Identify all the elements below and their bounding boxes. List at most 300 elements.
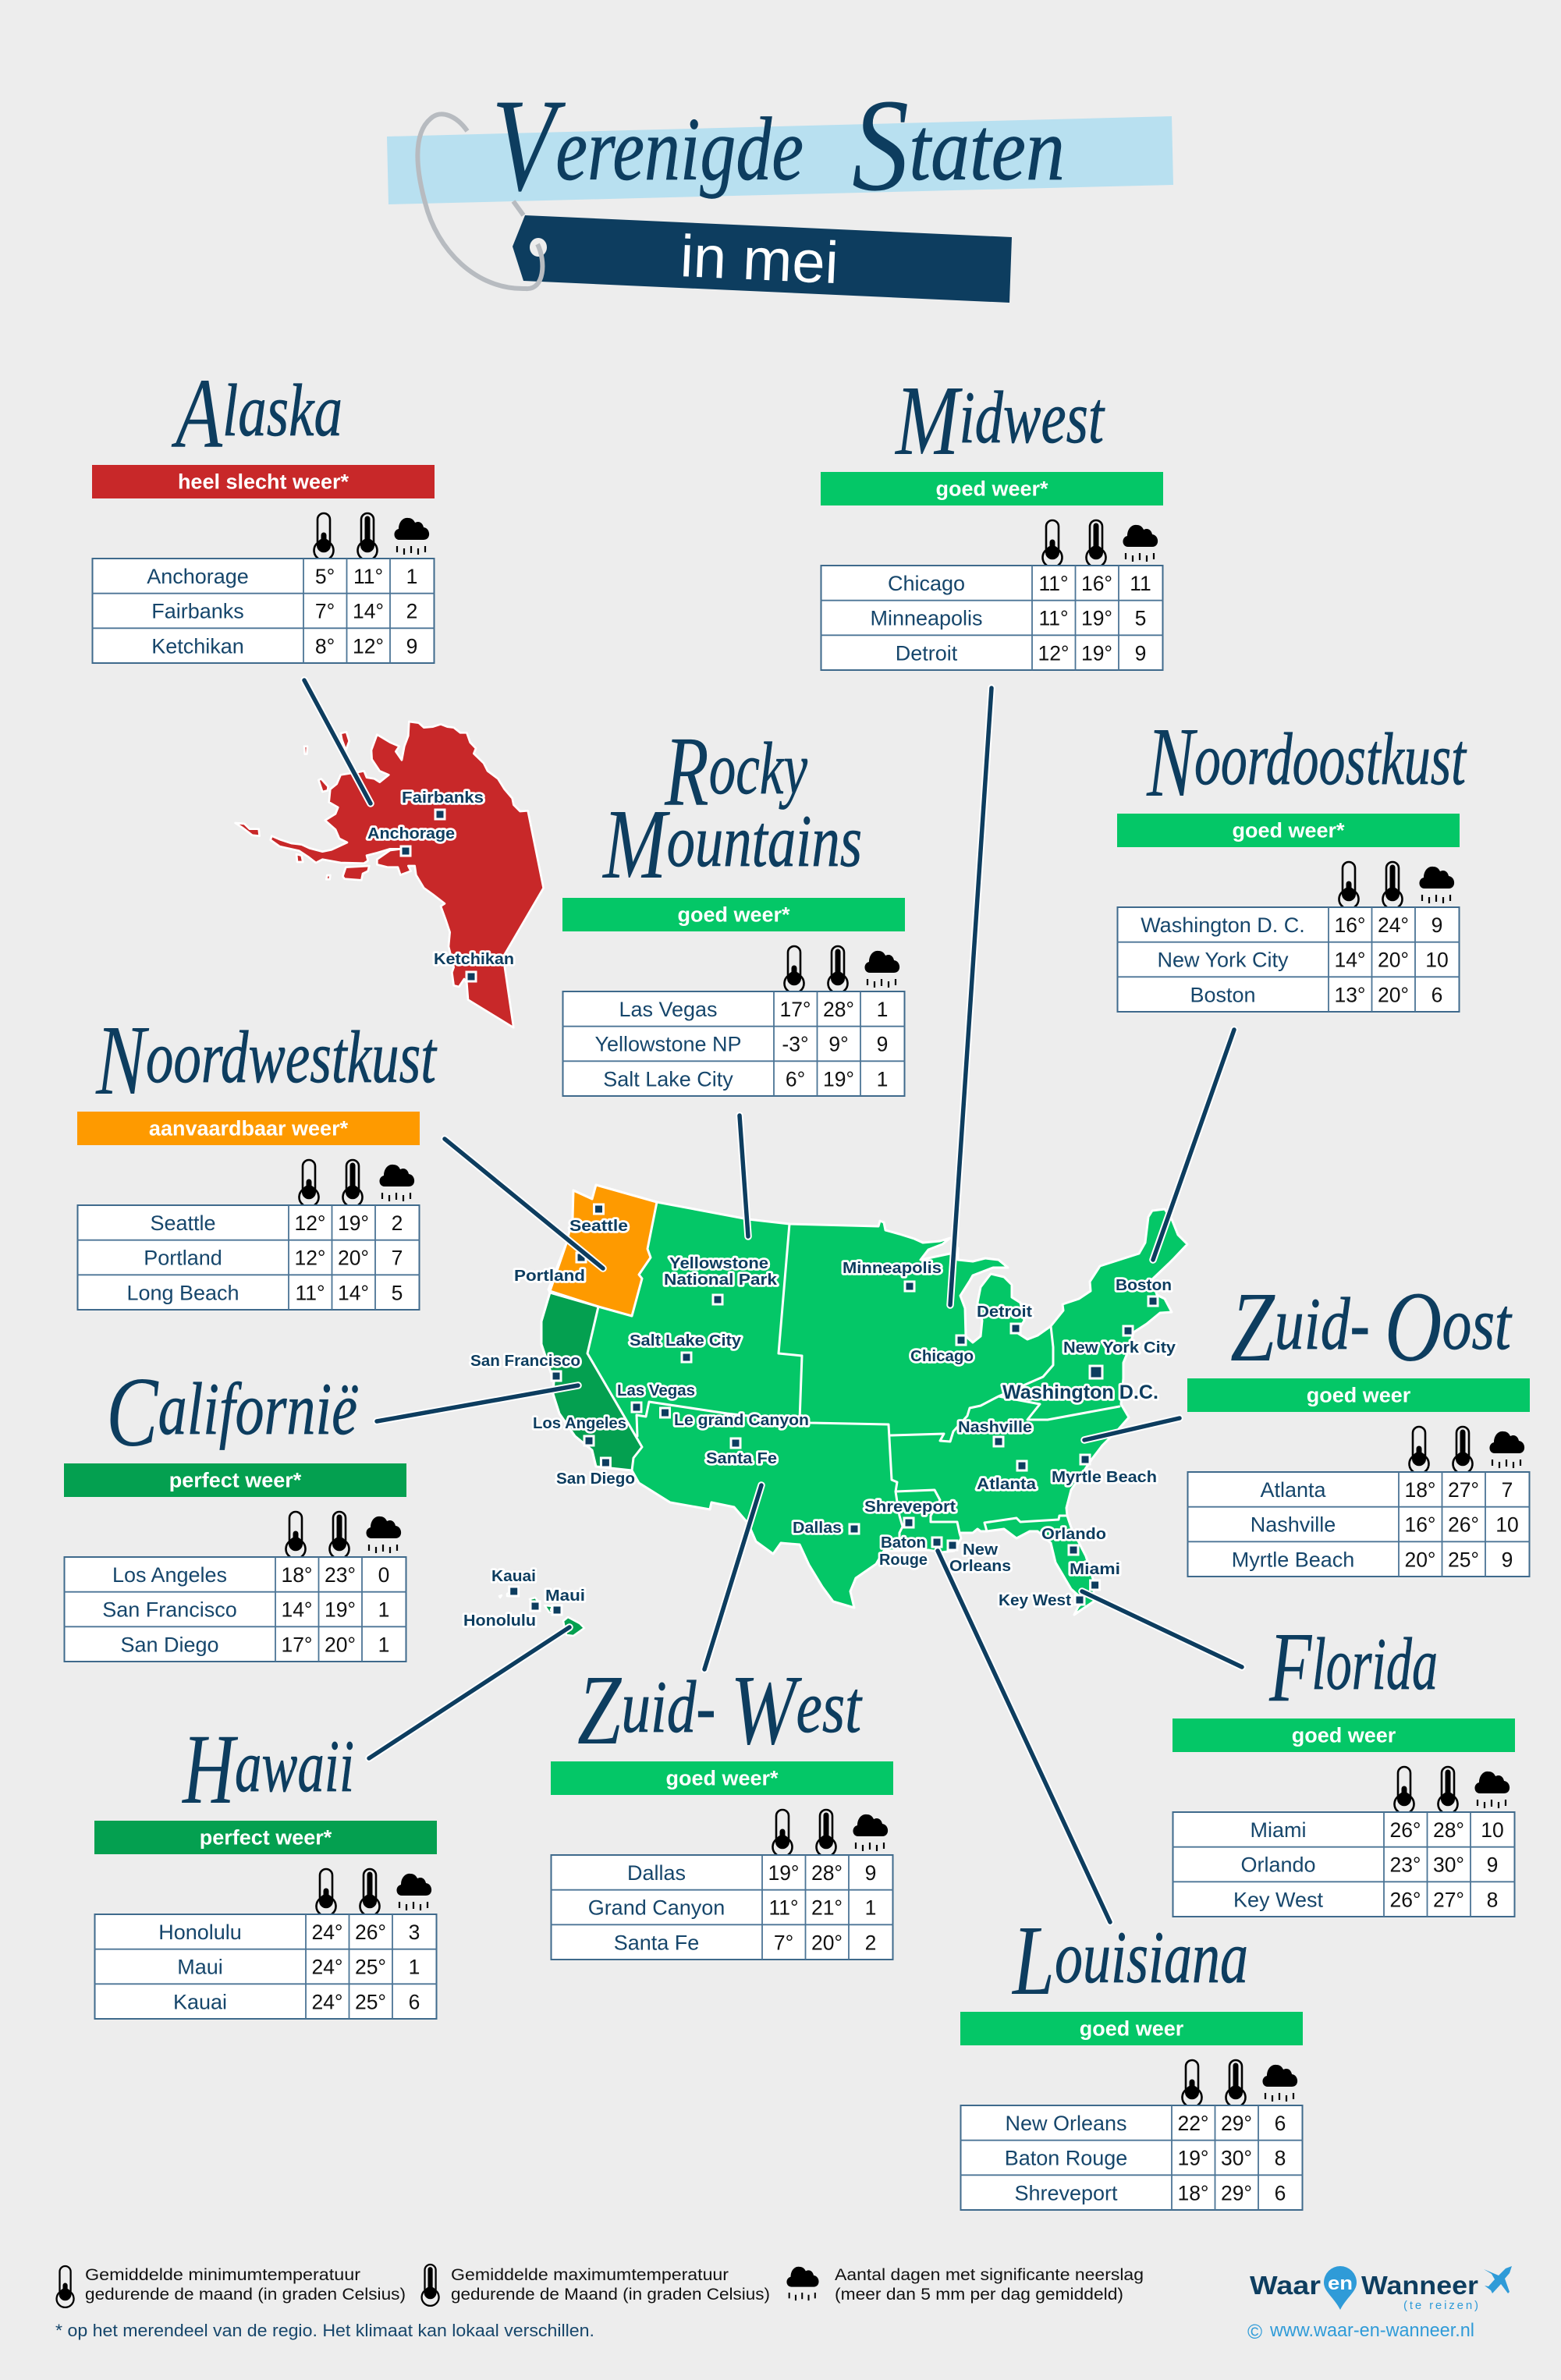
- weather table: 16°: [1081, 572, 1112, 595]
- weather table: 1: [406, 565, 417, 588]
- weather table: 28°: [823, 998, 854, 1021]
- city: Minneapolis: [843, 1259, 942, 1291]
- city: Shreveport: [864, 1498, 956, 1527]
- city: Santa Fe: Santa Fe: [706, 1449, 777, 1467]
- weather table: 11°: [353, 565, 383, 588]
- legend: precipitation: Aantal dagen met significante neerslag: [835, 2266, 1144, 2284]
- weather table: 25°: [355, 1990, 386, 2013]
- weather table: 9: [406, 634, 417, 658]
- weather table: Seattle: [150, 1211, 216, 1235]
- heading: A: [172, 358, 223, 469]
- city: Dallas: Dallas: [793, 1519, 842, 1537]
- weather table: 17°: [281, 1633, 313, 1656]
- city: Atlanta: [977, 1461, 1037, 1493]
- weather table: goed weer*: [665, 1767, 779, 1790]
- city: New Orleans: [948, 1541, 1011, 1575]
- weather table: 12°: [294, 1247, 326, 1270]
- weather table: Maui: [177, 1956, 223, 1979]
- callout line: Noordwestkust: [445, 1139, 603, 1268]
- weather table: 24°: [311, 1990, 343, 2013]
- heading: W: [730, 1655, 803, 1765]
- weather table: Miami: [1250, 1818, 1306, 1842]
- panel: Californië: [64, 1357, 406, 1662]
- weather table: 19°: [768, 1861, 800, 1885]
- city: Nashville: [958, 1418, 1032, 1446]
- weather table: 5°: [315, 565, 335, 588]
- weather table: 6°: [786, 1067, 805, 1091]
- callout line: Hawaii: [369, 1627, 569, 1758]
- weather table: 9°: [828, 1033, 849, 1056]
- weather table: Los Angeles: [112, 1563, 227, 1587]
- callout line: Florida: [1082, 1591, 1242, 1667]
- city: Portland: Portland: [514, 1267, 585, 1285]
- weather table: Kauai: [173, 1990, 227, 2013]
- heading: laska: [222, 369, 342, 452]
- city: Los Angeles: [533, 1414, 626, 1445]
- city: Kauai: Kauai: [491, 1567, 536, 1585]
- main title second word: S: [852, 72, 909, 218]
- weather table: -3°: [782, 1033, 809, 1056]
- weather table: goed weer: [1292, 1724, 1396, 1747]
- weather table: 26°: [1389, 1888, 1421, 1911]
- callout line: Alaska: [304, 680, 371, 803]
- weather table: 2: [865, 1931, 876, 1954]
- city: Shreveport: Shreveport: [864, 1498, 956, 1516]
- weather table: 2: [392, 1211, 403, 1235]
- weather table: [562, 898, 905, 1096]
- city: Orlando: Orlando: [1041, 1525, 1106, 1543]
- region borders: [637, 1224, 1119, 1537]
- weather table: 7: [1502, 1478, 1513, 1502]
- weather table: 19°: [1081, 607, 1112, 630]
- city labels: west: [463, 1204, 859, 1630]
- weather table: 20°: [1378, 949, 1409, 972]
- weather table: 6: [409, 1990, 420, 2013]
- heading: R: [664, 716, 709, 827]
- heading: C: [106, 1357, 159, 1467]
- weather table: 5: [1135, 607, 1146, 630]
- city: Portland: [514, 1253, 586, 1285]
- weather table: 7°: [774, 1931, 793, 1954]
- map: Hawaii islands: [499, 1592, 584, 1636]
- weather table: 19°: [1177, 2147, 1209, 2170]
- city labels: east: [843, 1259, 1176, 1609]
- legend: minimum temperature: [57, 2266, 406, 2307]
- weather table: 23°: [325, 1563, 356, 1587]
- heading: uid-: [1275, 1282, 1385, 1365]
- weather table: [1117, 814, 1460, 1012]
- weather table: 1: [409, 1956, 420, 1979]
- weather table: 10: [1425, 949, 1449, 972]
- weather table: 9: [865, 1861, 876, 1885]
- legend: minimum temperature: gedurende de maand (in graden Celsius): [85, 2286, 406, 2304]
- tag string: [417, 114, 542, 289]
- weather table: [1173, 1718, 1515, 1917]
- weather table: 1: [865, 1896, 876, 1920]
- weather table: 26°: [1389, 1818, 1421, 1842]
- weather table: San Diego: [120, 1633, 219, 1656]
- heading: lorida: [1311, 1623, 1438, 1705]
- title ribbon: [387, 116, 1173, 204]
- weather table: 18°: [1404, 1478, 1436, 1502]
- panel: Florida: [1173, 1612, 1515, 1917]
- weather table: goed weer*: [677, 903, 790, 927]
- weather table: [551, 1761, 893, 1960]
- city: Miami: [1070, 1560, 1120, 1590]
- city: Washington D.C.: [1002, 1366, 1158, 1403]
- weather table: 12°: [294, 1211, 326, 1235]
- weather table: Shreveport: [1014, 2181, 1118, 2204]
- city: San Francisco: [470, 1352, 580, 1381]
- weather table: 25°: [1448, 1548, 1479, 1571]
- weather table: Salt Lake City: [603, 1067, 733, 1091]
- legend: maximum temperature: gedurende de Maand (in graden Celsius): [451, 2286, 770, 2304]
- region: Noordwestkust: [550, 1185, 657, 1316]
- weather table: [821, 472, 1163, 670]
- city: Key West: Key West: [999, 1591, 1071, 1609]
- logo word: Waar: Waar: [1250, 2271, 1321, 2300]
- heading: F: [1268, 1612, 1313, 1722]
- weather table: 20°: [1404, 1548, 1436, 1571]
- weather table: Nashville: [1251, 1513, 1336, 1537]
- panel: Zuid-West: [551, 1655, 893, 1960]
- city: San Diego: San Diego: [556, 1470, 635, 1488]
- city: Fairbanks: [402, 789, 484, 819]
- city: Chicago: [910, 1335, 974, 1365]
- city: Seattle: [569, 1204, 628, 1235]
- weather table: Atlanta: [1260, 1478, 1327, 1502]
- weather table: San Francisco: [102, 1598, 237, 1622]
- luggage tag: [513, 215, 1012, 303]
- callout line: Zuid-Oost: [1084, 1418, 1180, 1440]
- heading: uid-: [621, 1665, 730, 1748]
- weather table: Baton Rouge: [1005, 2147, 1127, 2170]
- heading: idwest: [959, 376, 1105, 459]
- weather table: 14°: [353, 600, 384, 623]
- city: Boston: [1116, 1276, 1172, 1306]
- city: Detroit: Detroit: [977, 1303, 1032, 1321]
- logo pin text: en: [1328, 2273, 1353, 2294]
- weather table: 19°: [823, 1067, 854, 1091]
- city: Boston: Boston: [1116, 1276, 1172, 1294]
- callout line: Rocky Mountains: [740, 1116, 748, 1236]
- weather table: 1: [877, 1067, 888, 1091]
- weather table: 1: [877, 998, 888, 1021]
- weather table: Boston: [1190, 983, 1256, 1006]
- weather table: 14°: [338, 1281, 369, 1304]
- city: Myrtle Beach: Myrtle Beach: [1052, 1468, 1157, 1486]
- map: contiguous United States: [541, 1185, 1187, 1615]
- weather table: perfect weer*: [200, 1826, 332, 1850]
- city: New York City: New York City: [1063, 1339, 1176, 1357]
- city: Myrtle Beach: [1052, 1455, 1157, 1486]
- weather table: 18°: [1177, 2181, 1209, 2204]
- callout line: Noordoostkust: [1153, 1030, 1234, 1260]
- title block: [387, 72, 1173, 303]
- weather table: 11: [1130, 572, 1151, 595]
- website: www.waar-en-wanneer.nl: [1269, 2320, 1474, 2341]
- heading: M: [894, 365, 963, 476]
- weather table: Long Beach: [126, 1281, 239, 1304]
- city: Yellowstone National Park: [664, 1254, 778, 1304]
- subtitle: in mei: [679, 223, 840, 296]
- city: Baton Rouge: Baton: [881, 1534, 926, 1552]
- weather table: Santa Fe: [614, 1931, 699, 1954]
- city: Le grand Canyon: Le grand Canyon: [674, 1411, 809, 1429]
- weather table: goed weer*: [935, 477, 1048, 501]
- icon: copyright: ©: [1247, 2320, 1262, 2343]
- heading: H: [182, 1714, 239, 1825]
- city: New York City: [1063, 1326, 1176, 1357]
- city: Seattle: Seattle: [569, 1217, 628, 1235]
- weather table: 0: [378, 1563, 389, 1587]
- legend: precipitation: (meer dan 5 mm per dag gemiddeld): [835, 2286, 1123, 2304]
- city: Ketchikan: Ketchikan: [434, 950, 514, 968]
- heading: Z: [1230, 1272, 1275, 1382]
- weather table: [64, 1463, 406, 1662]
- weather table: 16°: [1334, 913, 1366, 937]
- heading: ocky: [709, 727, 808, 810]
- weather table: 24°: [1378, 913, 1409, 937]
- weather table: goed weer: [1080, 2017, 1184, 2041]
- weather table: [94, 1821, 437, 2019]
- region: Californië: [541, 1293, 642, 1470]
- city: Miami: Miami: [1070, 1560, 1120, 1578]
- weather table: Portland: [144, 1247, 222, 1270]
- weather table: 19°: [338, 1211, 369, 1235]
- heading: ost: [1442, 1282, 1513, 1365]
- weather table: heel slecht weer*: [178, 470, 349, 494]
- weather table: 7°: [315, 600, 335, 623]
- weather table: 13°: [1334, 983, 1366, 1006]
- weather table: 28°: [811, 1861, 843, 1885]
- heading: ouisiana: [1055, 1916, 1248, 1999]
- heading: alifornië: [158, 1367, 358, 1450]
- weather table: 14°: [281, 1598, 313, 1622]
- main title: erenigde: [555, 100, 804, 200]
- city: Baton Rouge: Rouge: [879, 1551, 928, 1569]
- panel: Noordwestkust: [77, 1005, 438, 1310]
- legend: [57, 2265, 1144, 2307]
- panel: Noordoostkust: [1117, 707, 1467, 1012]
- weather table: 20°: [811, 1931, 843, 1954]
- weather table: 5: [392, 1281, 403, 1304]
- city: Honolulu: [463, 1601, 540, 1630]
- weather table: Detroit: [896, 641, 958, 665]
- city: Yellowstone National Park: Yellowstone: [669, 1254, 768, 1272]
- weather table: New Orleans: [1005, 2112, 1127, 2135]
- weather table: 2: [406, 600, 417, 623]
- weather table: Orlando: [1240, 1853, 1316, 1877]
- heading: M: [601, 789, 670, 899]
- weather table: 30°: [1433, 1853, 1464, 1877]
- weather table: 11°: [1038, 607, 1069, 630]
- legend: maximum temperature: [422, 2265, 770, 2306]
- panel: Zuid-Oost: [1187, 1272, 1530, 1577]
- city: Salt Lake City: Salt Lake City: [630, 1332, 742, 1350]
- panel: Hawaii: [94, 1714, 437, 2019]
- city: Fairbanks: Fairbanks: [402, 789, 484, 807]
- city: Washington D.C.: Washington D.C.: [1002, 1382, 1158, 1403]
- weather table: Yellowstone NP: [594, 1033, 742, 1056]
- weather table: aanvaardbaar weer*: [149, 1117, 349, 1140]
- city: Las Vegas: [617, 1382, 695, 1412]
- heading: N: [95, 1005, 150, 1116]
- weather table: 11°: [295, 1281, 325, 1304]
- city: Detroit: [977, 1303, 1032, 1333]
- panel: Louisiana: [960, 1905, 1303, 2210]
- weather table: 20°: [1378, 983, 1409, 1006]
- weather table: 30°: [1221, 2147, 1252, 2170]
- weather table: 24°: [311, 1921, 343, 1944]
- weather table: 19°: [1081, 641, 1112, 665]
- weather table: 6: [1275, 2181, 1286, 2204]
- legend: minimum temperature: Gemiddelde minimumtemperatuur: [85, 2266, 360, 2284]
- city: New Orleans: New: [963, 1541, 998, 1559]
- city: Salt Lake City: [630, 1332, 742, 1362]
- city: Maui: [545, 1587, 585, 1615]
- city: Chicago: Chicago: [910, 1347, 974, 1365]
- weather table: 6: [1275, 2112, 1286, 2135]
- logo: [1247, 2266, 1512, 2343]
- city: Las Vegas: Las Vegas: [617, 1382, 695, 1399]
- city: Maui: Maui: [545, 1587, 585, 1605]
- heading: O: [1385, 1272, 1442, 1382]
- weather table: 12°: [1038, 641, 1070, 665]
- weather table: 27°: [1448, 1478, 1479, 1502]
- map: Alaska: [236, 722, 544, 1027]
- city: Minneapolis: Minneapolis: [843, 1259, 942, 1277]
- panel: Rocky Mountains: [562, 716, 905, 1096]
- weather table: Grand Canyon: [588, 1896, 725, 1920]
- city: Santa Fe: [706, 1438, 777, 1467]
- heading: ountains: [667, 800, 862, 882]
- weather table: Anchorage: [147, 565, 249, 588]
- logo word: Wanneer: Wanneer: [1361, 2271, 1478, 2300]
- legend: precipitation: [786, 2266, 1144, 2304]
- logo tagline: (te reizen): [1403, 2299, 1478, 2312]
- weather table: 20°: [325, 1633, 356, 1656]
- weather table: 14°: [1334, 949, 1366, 972]
- weather table: [960, 2012, 1303, 2210]
- weather table: perfect weer*: [169, 1469, 302, 1492]
- city: Orlando: [1041, 1525, 1106, 1555]
- footnote: * op het merendeel van de regio. Het klimaat kan lokaal verschillen.: [55, 2321, 594, 2340]
- heading: awaii: [235, 1725, 354, 1807]
- region silhouette: [541, 1185, 1187, 1615]
- weather table: 10: [1495, 1513, 1519, 1537]
- main title: V: [491, 72, 566, 218]
- city: Anchorage: [367, 825, 455, 856]
- weather table: 11°: [1038, 572, 1069, 595]
- weather table: 1: [378, 1598, 389, 1622]
- panel: Alaska: [92, 358, 435, 663]
- weather table: 1: [378, 1633, 389, 1656]
- heading: Z: [577, 1655, 623, 1765]
- weather table: Ketchikan: [151, 634, 244, 658]
- heading: oordwestkust: [146, 1016, 438, 1098]
- weather table: 29°: [1221, 2181, 1252, 2204]
- weather table: 25°: [355, 1956, 386, 1979]
- weather table: New York City: [1157, 949, 1289, 972]
- weather table: 8: [1275, 2147, 1286, 2170]
- heading: L: [1011, 1905, 1055, 2016]
- weather table: 9: [1432, 913, 1442, 937]
- city: Los Angeles: Los Angeles: [533, 1414, 626, 1432]
- weather table: 9: [1487, 1853, 1498, 1877]
- weather table: 6: [1432, 983, 1442, 1006]
- weather table: 8: [1487, 1888, 1498, 1911]
- weather table: Fairbanks: [151, 600, 244, 623]
- weather table: Washington D. C.: [1141, 913, 1305, 937]
- weather table: 3: [409, 1921, 420, 1944]
- weather table: 9: [877, 1033, 888, 1056]
- city: Honolulu: Honolulu: [463, 1612, 536, 1630]
- icon: plane: [1484, 2266, 1512, 2293]
- heading: N: [1146, 707, 1198, 818]
- weather table: [77, 1112, 420, 1310]
- city: Atlanta: Atlanta: [977, 1475, 1037, 1493]
- weather table: 12°: [353, 634, 384, 658]
- weather table: 16°: [1404, 1513, 1436, 1537]
- weather table: 28°: [1433, 1818, 1464, 1842]
- weather table: [92, 465, 435, 663]
- weather table: 18°: [281, 1563, 313, 1587]
- city: Kauai: [491, 1567, 536, 1596]
- weather table: Chicago: [888, 572, 965, 595]
- weather table: Key West: [1233, 1888, 1324, 1911]
- weather table: 9: [1502, 1548, 1513, 1571]
- weather table: 29°: [1221, 2112, 1252, 2135]
- weather table: 20°: [338, 1247, 369, 1270]
- city: New Orleans: Orleans: [949, 1557, 1011, 1575]
- weather table: 8°: [315, 634, 335, 658]
- city: Baton Rouge: [879, 1534, 942, 1569]
- heading: [601, 716, 862, 899]
- weather table: [1187, 1378, 1530, 1577]
- city: Anchorage: Anchorage: [367, 825, 455, 842]
- weather table: Honolulu: [158, 1921, 242, 1944]
- weather table: 7: [392, 1247, 403, 1270]
- weather table: 26°: [1448, 1513, 1479, 1537]
- weather table: Las Vegas: [619, 998, 718, 1021]
- weather table: 11°: [768, 1896, 799, 1920]
- city: Nashville: Nashville: [958, 1418, 1032, 1436]
- callout line: Californië: [377, 1385, 578, 1421]
- weather table: 9: [1135, 641, 1146, 665]
- weather table: 10: [1481, 1818, 1504, 1842]
- panel: Midwest: [821, 365, 1163, 670]
- tag hole: [530, 238, 547, 257]
- legend: maximum temperature: Gemiddelde maximumtemperatuur: [451, 2266, 729, 2284]
- weather table: 26°: [355, 1921, 386, 1944]
- weather table: 17°: [779, 998, 811, 1021]
- weather table: 24°: [311, 1956, 343, 1979]
- weather table: 21°: [811, 1896, 843, 1920]
- weather table: Dallas: [627, 1861, 686, 1885]
- weather table: Myrtle Beach: [1232, 1548, 1354, 1571]
- callout line: Louisiana: [938, 1551, 1110, 1922]
- weather table: 23°: [1389, 1853, 1421, 1877]
- weather table: 19°: [325, 1598, 356, 1622]
- callout line: Midwest: [950, 688, 992, 1305]
- city: San Francisco: San Francisco: [470, 1352, 580, 1370]
- weather table: 27°: [1433, 1888, 1464, 1911]
- weather table: goed weer*: [1232, 819, 1345, 842]
- city: San Diego: [556, 1458, 635, 1488]
- city: Yellowstone National Park: National Park: [664, 1271, 778, 1289]
- heading: est: [796, 1665, 863, 1748]
